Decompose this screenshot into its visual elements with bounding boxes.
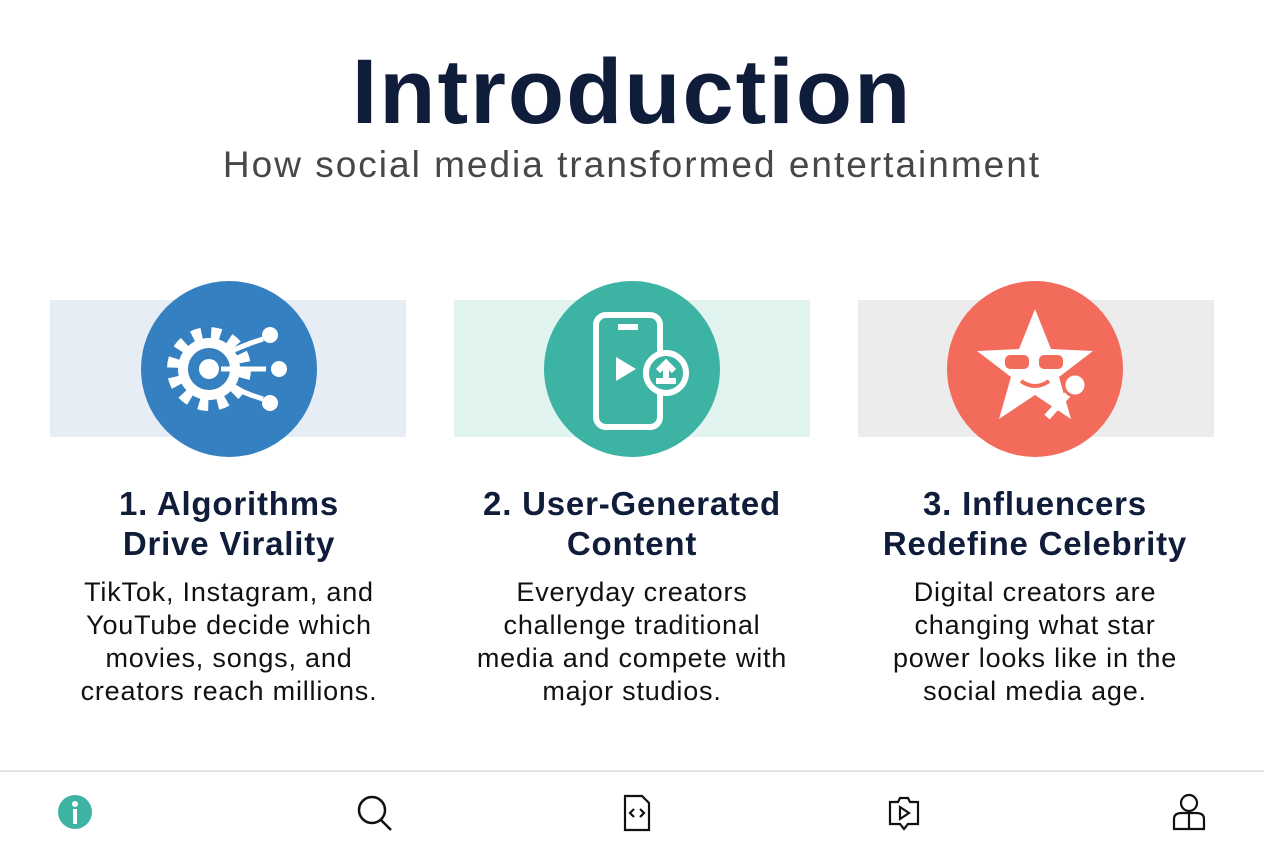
icon: gear network	[141, 281, 317, 457]
column 2 text: challenge traditional	[504, 610, 760, 640]
column 3 text: 3. Influencers	[923, 485, 1147, 522]
column 2 text: major studios.	[542, 676, 722, 706]
icon: phone upload	[544, 281, 720, 457]
column 3 text	[883, 485, 1187, 706]
panel band 2	[454, 300, 810, 437]
title: Introduction	[352, 41, 912, 143]
column 3 text: Digital creators are	[914, 577, 1156, 607]
column 1 text	[81, 485, 377, 706]
column 3 text: power looks like in the	[893, 643, 1177, 673]
column 1 text: YouTube decide which	[86, 610, 372, 640]
icon: info	[58, 795, 92, 829]
column 1 text: 1. Algorithms	[119, 485, 339, 522]
column 1 text: Drive Virality	[123, 525, 335, 562]
icon: code file	[624, 794, 650, 832]
column 3 text: social media age.	[923, 676, 1147, 706]
icon: user	[1172, 794, 1206, 830]
icon: search	[358, 796, 392, 831]
column 1 text: TikTok, Instagram, and	[84, 577, 374, 607]
panel band 3	[858, 300, 1214, 437]
column 1 text: movies, songs, and	[105, 643, 353, 673]
bottom nav	[0, 770, 1264, 850]
panel band 1	[50, 300, 406, 437]
column 2 text: 2. User-Generated	[483, 485, 781, 522]
column 2 text: media and compete with	[477, 643, 787, 673]
column 2 text: Everyday creators	[516, 577, 748, 607]
column 2 text	[477, 485, 787, 706]
column 3 text: Redefine Celebrity	[883, 525, 1187, 562]
subtitle: How social media transformed entertainment	[223, 144, 1041, 185]
column 3 text: changing what star	[914, 610, 1156, 640]
icon: star with sunglasses	[947, 281, 1123, 457]
column 1 text: creators reach millions.	[81, 676, 377, 706]
column 2 text: Content	[567, 525, 697, 562]
icon: video	[888, 796, 920, 831]
